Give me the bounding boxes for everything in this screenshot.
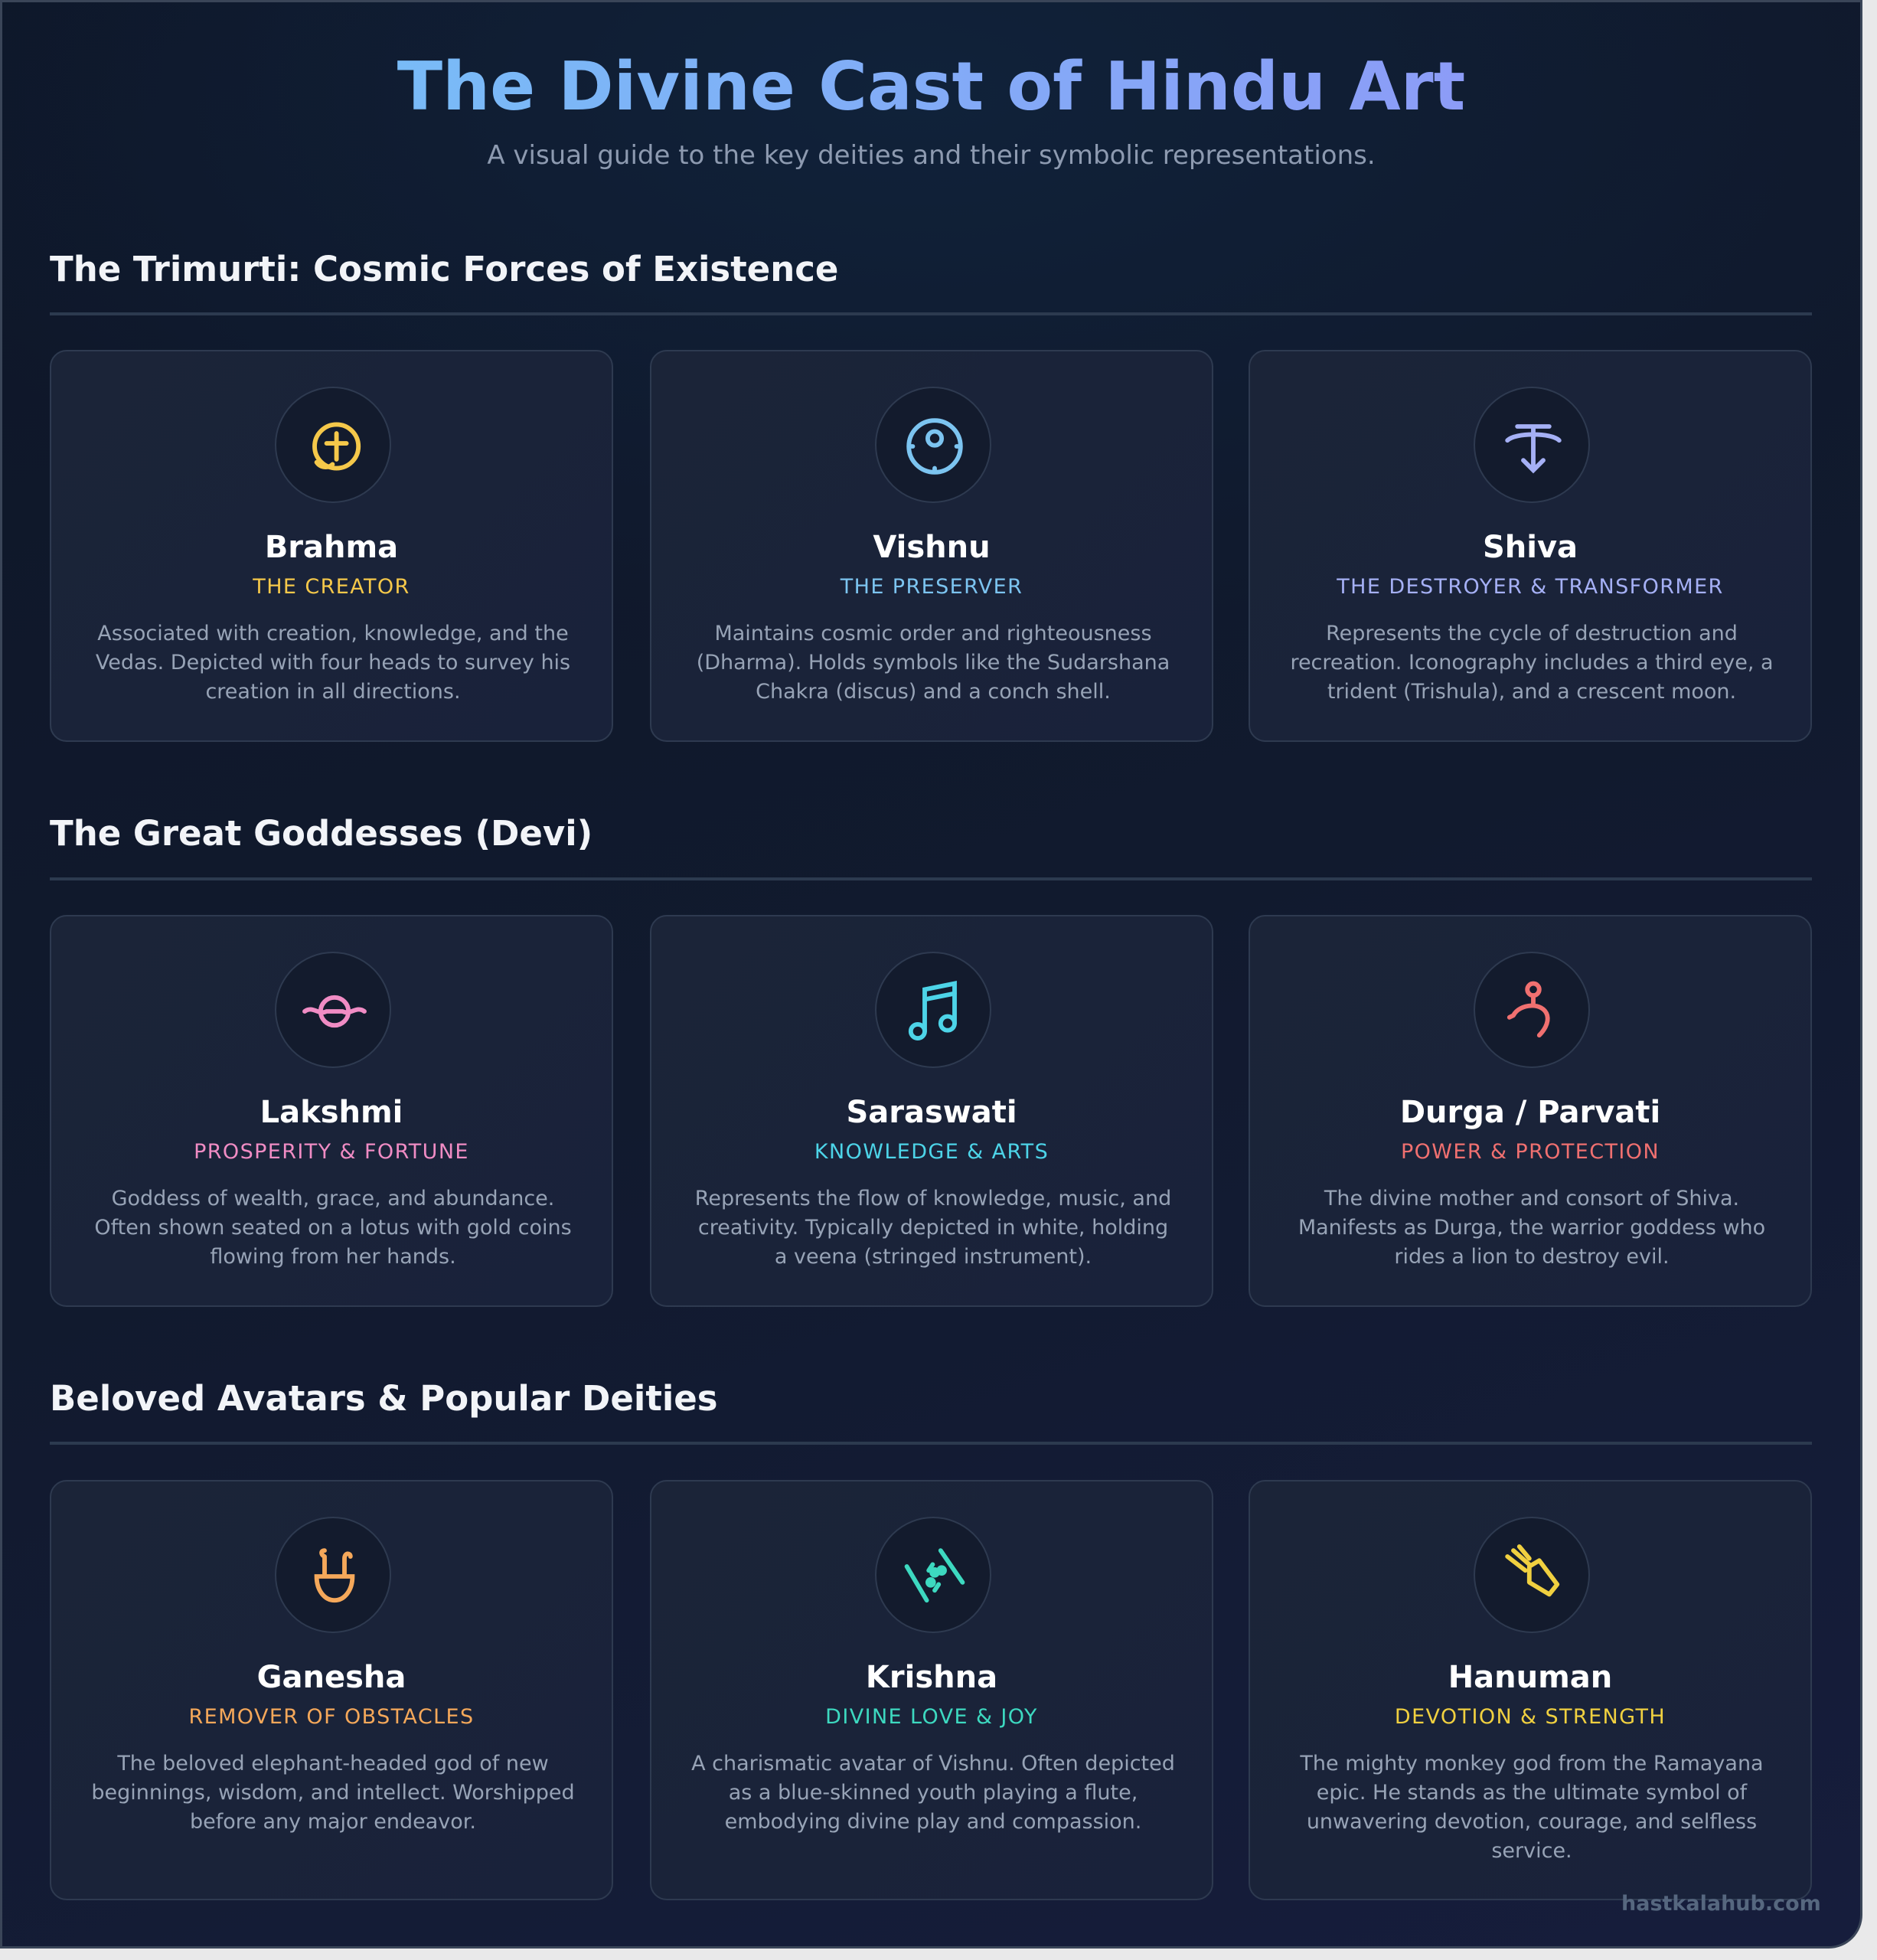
card: Hanuman: DEVOTION & STRENGTH (1395, 1705, 1666, 1729)
card: Vishnu (650, 350, 1213, 742)
card: Shiva: Represents the cycle of destruction and recreation. Iconography includes a third eye, a trident (Trishula), and a crescent moon. (1290, 622, 1774, 704)
card: Hanuman (1249, 1480, 1812, 1900)
card: Shiva: THE DESTROYER & TRANSFORMER (1337, 575, 1724, 599)
heading: Trimurti: The Trimurti: Cosmic Forces of Existence (50, 249, 838, 289)
heading: Goddesses: The Great Goddesses (Devi) (50, 813, 592, 854)
card: Durga (1249, 915, 1812, 1307)
card: Krishna (650, 1480, 1213, 1900)
icon: Lakshmi (275, 952, 391, 1068)
card: Ganesha: The beloved elephant-headed god of new beginnings, wisdom, and intellect. Worshipped before any major endeavor. (91, 1752, 575, 1834)
card: Ganesha: Ganesha (257, 1660, 406, 1695)
icon: Saraswati (875, 952, 991, 1068)
card: Krishna: A charismatic avatar of Vishnu. Often depicted as a blue-skinned youth playing a flute, embodying divine play and compassion. (691, 1752, 1175, 1834)
icon: Durga (1474, 952, 1590, 1068)
card: Vishnu: THE PRESERVER (841, 575, 1023, 599)
card: Shiva (1249, 350, 1812, 742)
heading: Avatars: Beloved Avatars & Popular Deities (50, 1378, 718, 1419)
card: Hanuman: The mighty monkey god from the Ramayana epic. He stands as the ultimate symbol of unwavering devotion, courage, and selfless service. (1300, 1752, 1764, 1863)
card: Lakshmi: Lakshmi (260, 1095, 403, 1130)
card: Brahma: Associated with creation, knowledge, and the Vedas. Depicted with four heads to survey his creation in all directions. (96, 622, 570, 704)
card: Durga: POWER & PROTECTION (1401, 1140, 1660, 1164)
title: The Divine Cast of Hindu Art (397, 47, 1465, 126)
card: Saraswati (650, 915, 1213, 1307)
card: Lakshmi (50, 915, 613, 1307)
card: Vishnu: Maintains cosmic order and righteousness (Dharma). Holds symbols like the Sudarshana Chakra (discus) and a conch shell. (697, 622, 1170, 704)
card: Lakshmi: Goddess of wealth, grace, and abundance. Often shown seated on a lotus with gold coins flowing from her hands. (94, 1187, 572, 1269)
card: Krishna: DIVINE LOVE & JOY (825, 1705, 1038, 1729)
card: Durga: The divine mother and consort of Shiva. Manifests as Durga, the warrior goddess who rides a lion to destroy evil. (1298, 1187, 1765, 1269)
card: Lakshmi: PROSPERITY & FORTUNE (194, 1140, 469, 1164)
card: Shiva: Shiva (1483, 530, 1578, 565)
card: Saraswati: KNOWLEDGE & ARTS (814, 1140, 1049, 1164)
icon: Krishna (875, 1517, 991, 1633)
watermark: hastkalahub.com (1621, 1892, 1821, 1916)
card: Ganesha (50, 1480, 613, 1900)
card: Brahma: Brahma (265, 530, 398, 565)
card: Brahma: THE CREATOR (253, 575, 410, 599)
card: Brahma (50, 350, 613, 742)
icon: Ganesha (275, 1517, 391, 1633)
card: Hanuman: Hanuman (1448, 1660, 1612, 1695)
card: Saraswati: Represents the flow of knowledge, music, and creativity. Typically depicted in white, holding a veena (stringed instrument). (695, 1187, 1171, 1269)
card: Ganesha: REMOVER OF OBSTACLES (188, 1705, 475, 1729)
card: Vishnu: Vishnu (873, 530, 991, 565)
card: Saraswati: Saraswati (846, 1095, 1017, 1130)
card: Durga: Durga / Parvati (1400, 1095, 1660, 1130)
icon: Shiva (1474, 387, 1590, 503)
card: Krishna: Krishna (866, 1660, 997, 1695)
subtitle: A visual guide to the key deities and their symbolic representations. (487, 140, 1376, 171)
icon: Brahma (275, 387, 391, 503)
icon: Vishnu (875, 387, 991, 503)
icon: Hanuman (1474, 1517, 1590, 1633)
